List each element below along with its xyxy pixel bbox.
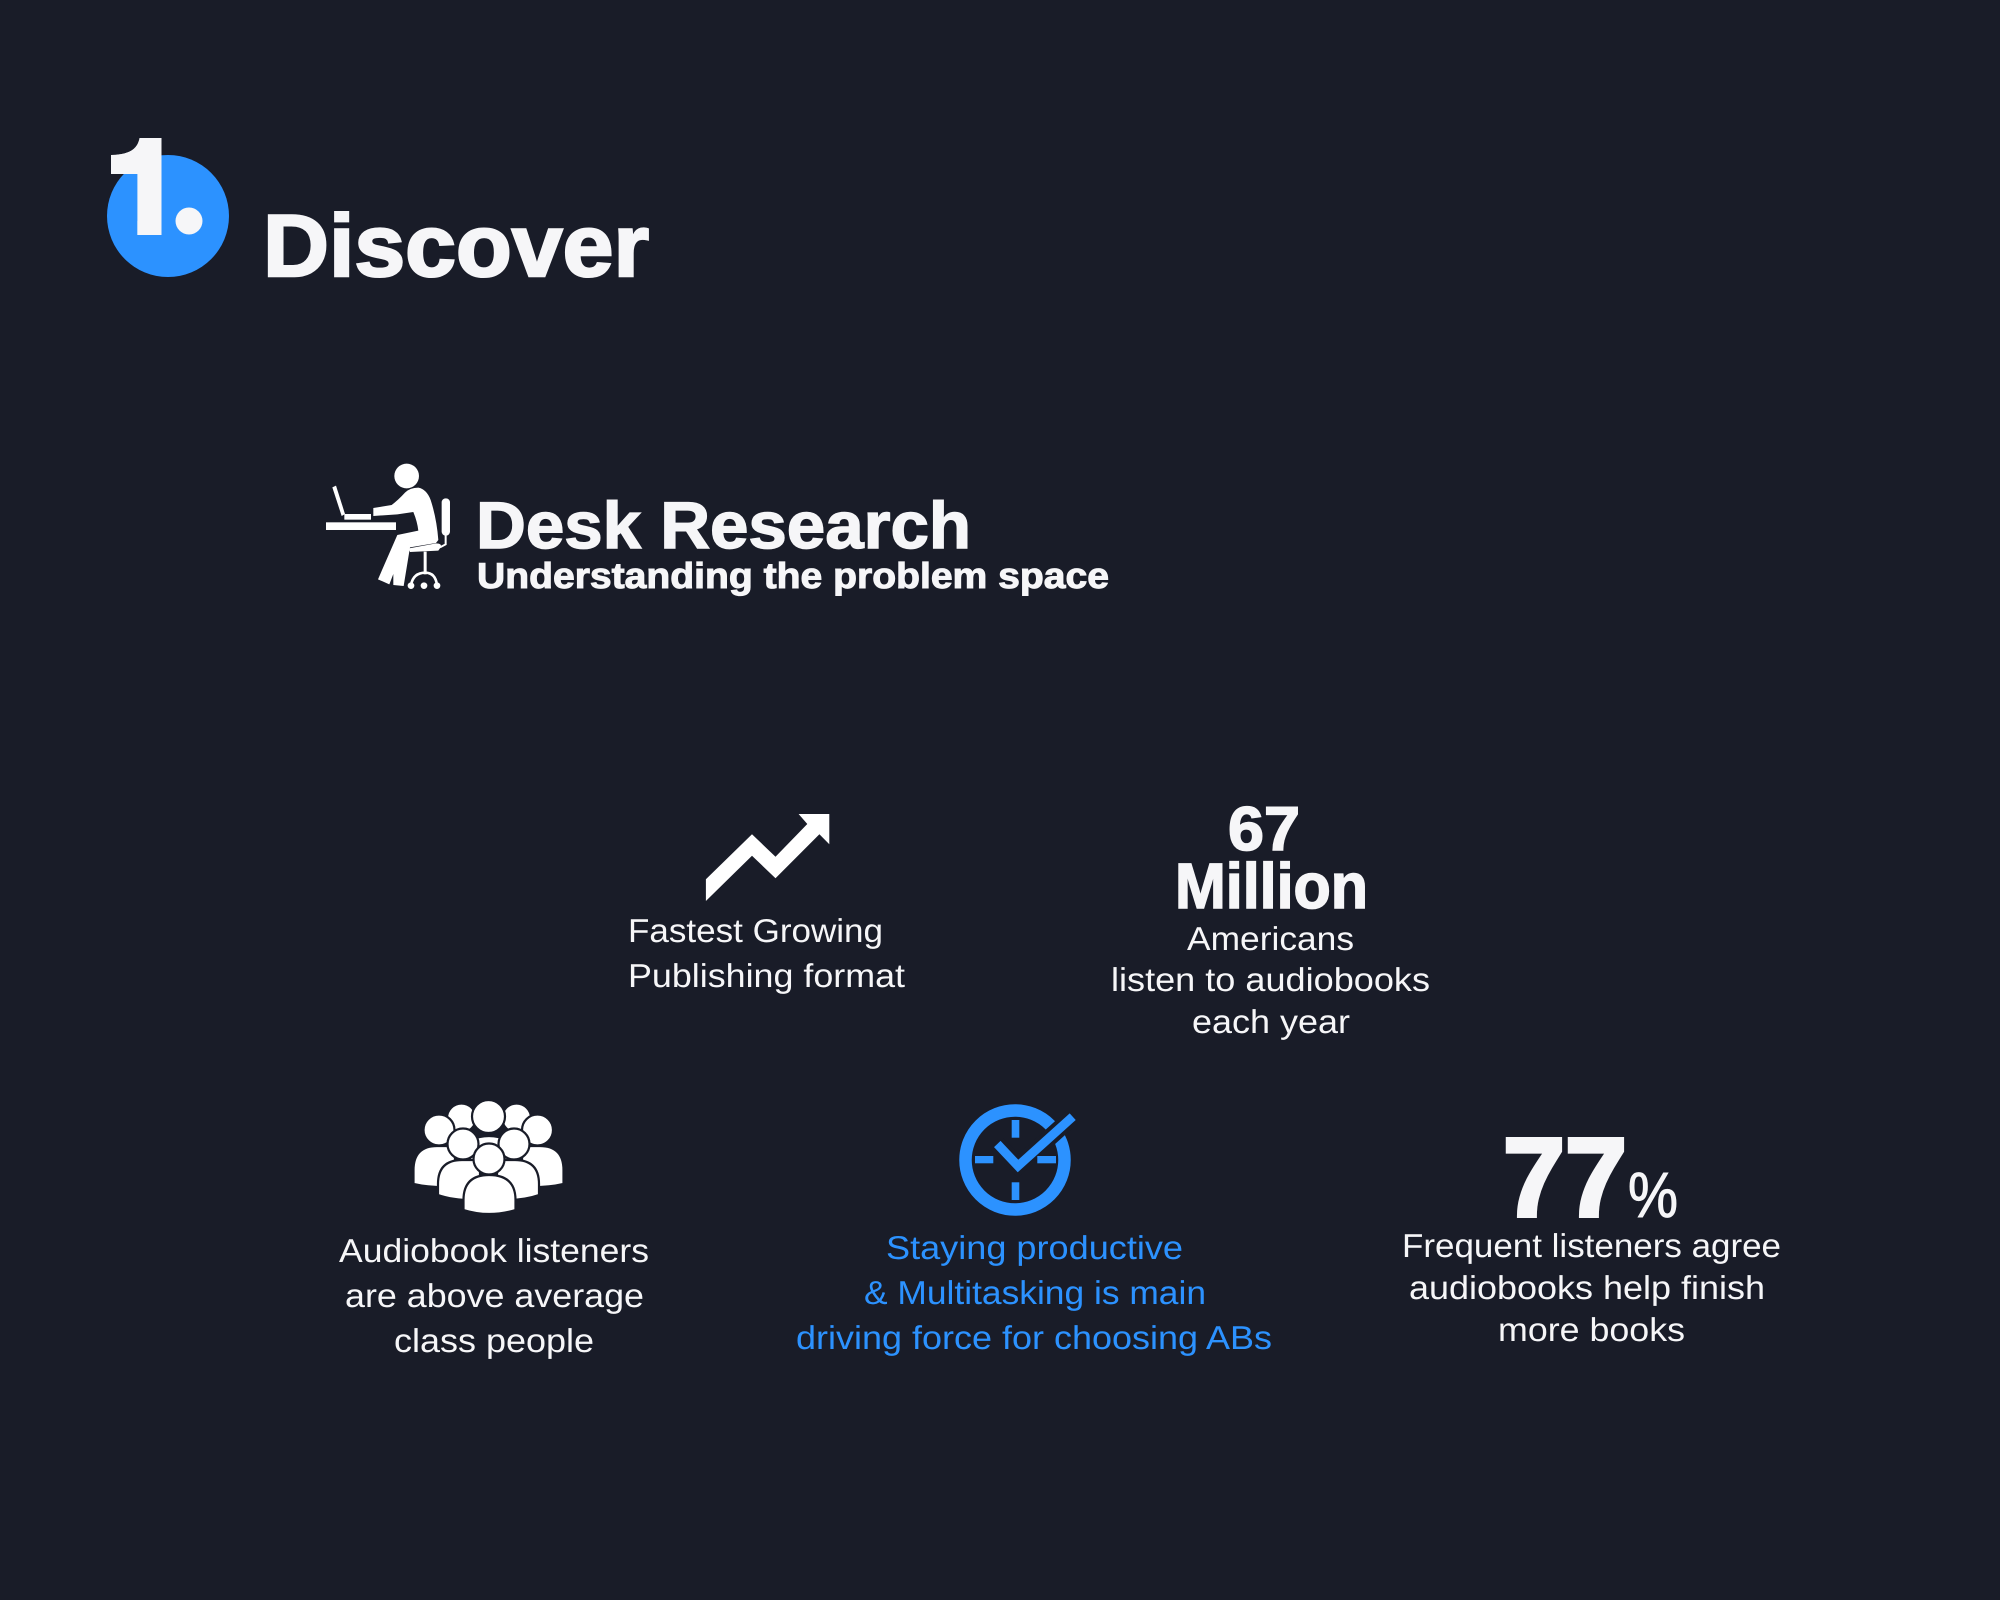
figure: 67 Million: 67 <box>1228 795 1300 864</box>
text: audiobook listeners <box>339 1232 649 1359</box>
text: fastest growing publishing format <box>628 912 905 994</box>
stat: 77 percent <box>1402 1115 1781 1348</box>
icon: group of people <box>414 1100 564 1214</box>
stat: staying productive <box>796 1110 1272 1356</box>
section number badge <box>107 138 229 277</box>
text: frequent listeners: Frequent listeners agree <box>1402 1227 1781 1264</box>
text: Americans listen to audiobooks: Americans <box>1187 920 1354 957</box>
text: frequent listeners: audiobooks help finish <box>1409 1269 1765 1306</box>
text: staying productive <box>796 1229 1272 1356</box>
text: audiobook listeners: are above average <box>345 1277 644 1314</box>
stat: listeners class <box>339 1100 649 1359</box>
text: audiobook listeners: class people <box>394 1322 594 1359</box>
icon: person at desk <box>326 464 450 589</box>
text: fastest growing publishing format: Fastest Growing <box>628 912 883 949</box>
text: staying productive: driving force for choosing ABs <box>796 1319 1272 1356</box>
infographic canvas <box>107 138 1780 1359</box>
icon: clock with check mark <box>966 1110 1073 1210</box>
text: frequent listeners <box>1402 1227 1781 1348</box>
figure: 77%: % <box>1628 1159 1678 1231</box>
section number badge: 1 <box>106 111 183 265</box>
text: Americans listen to audiobooks <box>1111 920 1430 1040</box>
figure: 67 Million: Million <box>1175 850 1368 922</box>
text: staying productive: & Multitasking is main <box>864 1274 1206 1311</box>
figure: 77%: 77 <box>1503 1115 1627 1240</box>
figure: 67 Million <box>1175 795 1368 922</box>
title: Discover: Discover <box>263 196 649 295</box>
stat: 67 million <box>1111 795 1430 1040</box>
text: Americans listen to audiobooks: listen to audiobooks <box>1111 961 1430 998</box>
icon: rising arrow <box>706 814 829 901</box>
subheading: Understanding the problem space <box>477 555 1109 596</box>
text: fastest growing publishing format: Publishing format <box>628 957 905 994</box>
text: staying productive: Staying productive <box>886 1229 1183 1266</box>
stat: fastest growing <box>628 814 905 994</box>
text: audiobook listeners: Audiobook listeners <box>339 1232 649 1269</box>
heading: Desk Research: Desk Research <box>476 488 971 562</box>
text: Americans listen to audiobooks: each year <box>1192 1003 1350 1040</box>
text: frequent listeners: more books <box>1498 1311 1685 1348</box>
